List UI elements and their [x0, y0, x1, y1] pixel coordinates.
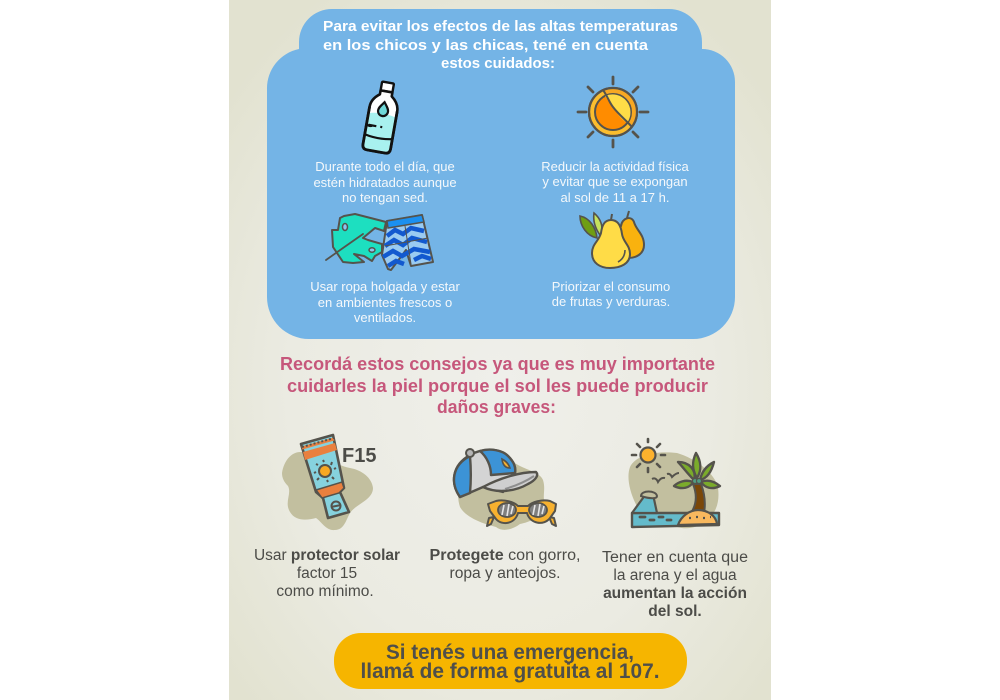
panel shape — [267, 9, 735, 339]
text: protector solar — [254, 547, 400, 600]
text: actividad física: al sol de 11 a 17 h. — [561, 190, 669, 205]
palm leaves — [674, 453, 720, 488]
text: hidratados: Durante todo el día, que — [315, 159, 455, 174]
callout: emergencia: Si tenés una emergencia, — [386, 641, 634, 664]
text: arena y agua: aumentan la acción — [603, 585, 747, 602]
text: ropa holgada — [310, 279, 460, 325]
palm trunk — [691, 484, 705, 513]
callout: emergencia: llamá de forma gratuita al 107. — [360, 660, 660, 683]
title: en los chicos y las chicas, tené en cuenta — [323, 37, 649, 54]
text: ropa holgada: Usar ropa holgada y estar — [310, 279, 460, 294]
sand — [678, 510, 717, 525]
text: frutas y verduras — [552, 279, 670, 309]
text: arena y agua: del sol. — [648, 603, 702, 620]
heading: consejos: cuidarles la piel porque el sol les puede producir — [287, 376, 708, 396]
heading: consejos: daños graves: — [437, 397, 556, 417]
sunglasses — [487, 500, 556, 526]
icon: sunscreen F15 — [282, 435, 376, 530]
icon: beach — [628, 439, 720, 528]
trunks — [382, 215, 433, 270]
text: protector solar: factor 15 — [297, 565, 357, 582]
panel: cuidados — [267, 9, 735, 339]
leaf — [332, 214, 386, 263]
sun — [640, 448, 656, 462]
title — [323, 18, 678, 72]
text: arena y agua: Tener en cuenta que — [602, 549, 748, 566]
icon: pears — [580, 211, 644, 268]
icon: leaf and swim trunks — [326, 214, 433, 270]
text: frutas y verduras: Priorizar el consumo — [552, 279, 670, 294]
icon: cap and sunglasses — [454, 449, 556, 530]
text: hidratados — [313, 159, 457, 205]
text: actividad física — [541, 159, 689, 205]
icon: sun crossed — [578, 77, 648, 147]
water and rock — [632, 513, 719, 527]
text: ropa holgada: ventilados. — [354, 310, 416, 325]
background panel — [229, 0, 771, 700]
icon: water bottle — [362, 80, 402, 154]
text: hidratados: no tengan sed. — [342, 190, 428, 205]
text: arena y agua: la arena y el agua — [613, 567, 737, 584]
heading: consejos: Recordá estos consejos ya que es muy importante — [280, 354, 715, 374]
text: frutas y verduras: de frutas y verduras. — [552, 294, 670, 309]
title: Para evitar los efectos de las altas temperaturas — [323, 18, 678, 35]
text: gorro y anteojos: Protegete con gorro, — [430, 547, 580, 564]
callout: emergencia — [334, 633, 687, 689]
text: actividad física: y evitar que se expongan — [542, 174, 688, 189]
text: hidratados: estén hidratados aunque — [313, 175, 457, 190]
text: gorro y anteojos — [430, 547, 580, 582]
crown — [454, 450, 515, 497]
text: actividad física: Reducir la actividad física — [541, 159, 689, 174]
label: F15: F15 — [342, 445, 376, 467]
text: protector solar: como mínimo. — [276, 583, 374, 600]
heading: consejos — [280, 354, 715, 417]
text: gorro y anteojos: ropa y anteojos. — [450, 565, 560, 582]
text: ropa holgada: en ambientes frescos o — [318, 295, 452, 310]
text: arena y agua — [602, 549, 748, 620]
text: protector solar: Usar protector solar — [254, 547, 400, 564]
title: estos cuidados: — [441, 55, 555, 72]
visor — [483, 472, 537, 491]
